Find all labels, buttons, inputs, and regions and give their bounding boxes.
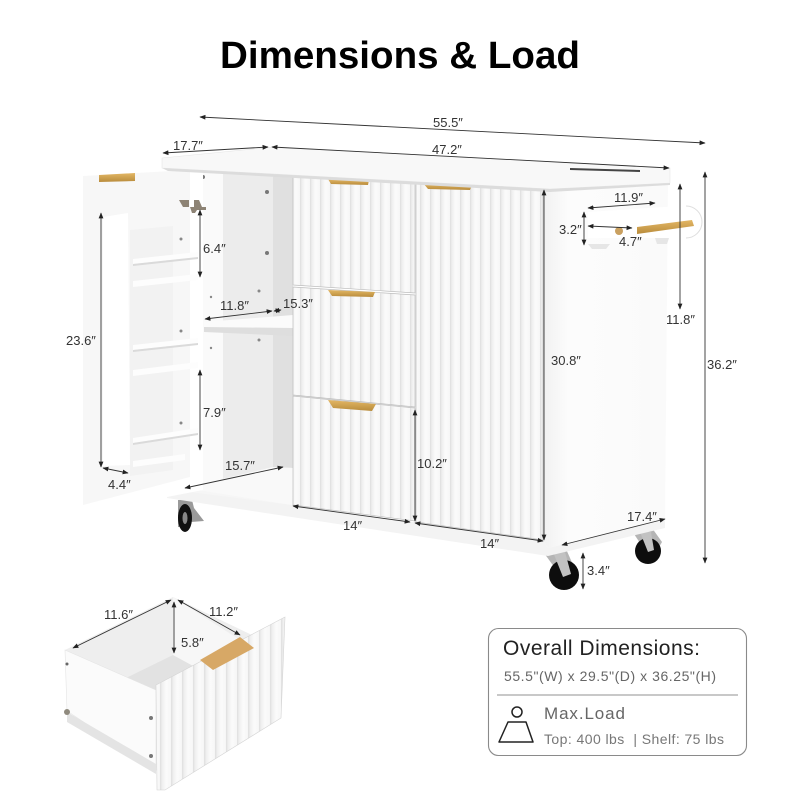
dim: 3.4: 3.4″ bbox=[587, 563, 610, 578]
dim: 11.2 bbox=[178, 600, 240, 635]
dim: 30.8: 30.8″ bbox=[551, 353, 581, 368]
drawer slide rail bbox=[67, 712, 156, 774]
dim: 17.4: 17.4″ bbox=[627, 509, 657, 524]
open door with spice rack bbox=[83, 170, 206, 505]
dim: 11.2: 11.2″ bbox=[209, 604, 238, 619]
fluted cabinet door bbox=[416, 183, 543, 540]
icon: load weight bbox=[499, 707, 533, 742]
title: Dimensions & Load bbox=[220, 35, 580, 77]
drawer fluted front bbox=[156, 617, 285, 790]
dim: 15.7: 15.7″ bbox=[225, 458, 255, 473]
dim: 17.7 bbox=[163, 138, 268, 153]
dim: 3.2: 3.2″ bbox=[559, 222, 582, 237]
fluted drawer 3 bbox=[293, 396, 415, 521]
fluted drawer 1 bbox=[293, 177, 415, 293]
dim: 55.5: 55.5″ bbox=[433, 115, 463, 130]
dim: 11.9: 11.9″ bbox=[614, 190, 643, 205]
cart bottom rail bbox=[167, 488, 665, 556]
dim: 11.6 bbox=[73, 600, 171, 648]
dim: 17.7: 17.7″ bbox=[173, 138, 203, 153]
dim: 11.8 shelf: 11.8″ bbox=[220, 298, 249, 313]
panel: overall dimensions and max load bbox=[488, 628, 746, 756]
dim: 15.7 bbox=[185, 458, 283, 488]
fluted drawer 2 bbox=[293, 287, 415, 407]
drawer 3 handle bbox=[328, 400, 376, 411]
heading: max load: Max.Load bbox=[544, 704, 625, 723]
open drawer illustration bbox=[64, 597, 285, 790]
cart side panel bbox=[543, 180, 668, 548]
dim: 10.2: 10.2″ bbox=[417, 456, 447, 471]
dim: 5.8 bbox=[174, 602, 204, 653]
dim: 14 left bbox=[293, 506, 410, 533]
dim: 55.5 bbox=[200, 115, 705, 143]
kitchen island cart illustration bbox=[83, 147, 702, 590]
wheel: right front caster bbox=[544, 549, 579, 590]
text: load values: Top: 400 lbs | Shelf: 75 lbs bbox=[544, 731, 724, 747]
dim: 4.4: 4.4″ bbox=[108, 477, 131, 492]
dim: 11.6: 11.6″ bbox=[104, 607, 133, 622]
dim: 6.4: 6.4″ bbox=[203, 241, 226, 256]
text: overall size: 55.5"(W) x 29.5"(D) x 36.25"(H) bbox=[504, 668, 716, 684]
dim: 15.3: 15.3″ bbox=[283, 296, 313, 311]
dim: 6.4 bbox=[200, 210, 226, 277]
open cabinet interior bbox=[185, 170, 293, 505]
dim: 14 left: 14″ bbox=[343, 518, 362, 533]
drawer 1 handle bbox=[328, 179, 369, 185]
drawer side panel bbox=[65, 650, 156, 770]
dim: 7.9 bbox=[200, 370, 226, 450]
towel bar with brackets bbox=[588, 206, 702, 249]
dim: 14 right bbox=[415, 523, 543, 551]
dim: 47.2 bbox=[272, 142, 669, 168]
dimension labels on the cart bbox=[66, 115, 737, 589]
wheel: right rear caster bbox=[634, 528, 662, 564]
dim: 10.2 bbox=[415, 410, 447, 521]
dim: 4.7 bbox=[588, 226, 642, 249]
dim: 4.7: 4.7″ bbox=[619, 234, 642, 249]
dim: 11.8 shelf bbox=[205, 298, 272, 319]
door handle gold bbox=[99, 173, 135, 182]
dim: 11.8 side: 11.8″ bbox=[666, 312, 695, 327]
drawer handle gold bbox=[200, 637, 254, 670]
dim: 4.4 bbox=[103, 468, 131, 492]
dim: 11.9 bbox=[588, 190, 655, 208]
heading: overall dimensions: Overall Dimensions: bbox=[503, 637, 700, 660]
door handle bbox=[423, 183, 472, 190]
dim: 36.2: 36.2″ bbox=[707, 357, 737, 372]
dim: 7.9: 7.9″ bbox=[203, 405, 226, 420]
door hinge bbox=[179, 200, 206, 213]
marble countertop bbox=[162, 147, 670, 192]
dim: 47.2: 47.2″ bbox=[432, 142, 462, 157]
dim: 3.2 bbox=[559, 212, 584, 245]
dim: 3.4 bbox=[583, 553, 610, 589]
dim: 14 right: 14″ bbox=[480, 536, 499, 551]
drawer 2 handle bbox=[328, 290, 375, 297]
drawer interior walls bbox=[65, 597, 283, 690]
dim: 5.8: 5.8″ bbox=[181, 635, 204, 650]
dim: 17.4 bbox=[562, 509, 665, 545]
wheel: left caster bbox=[178, 500, 204, 532]
dim: 23.6: 23.6″ bbox=[66, 333, 96, 348]
